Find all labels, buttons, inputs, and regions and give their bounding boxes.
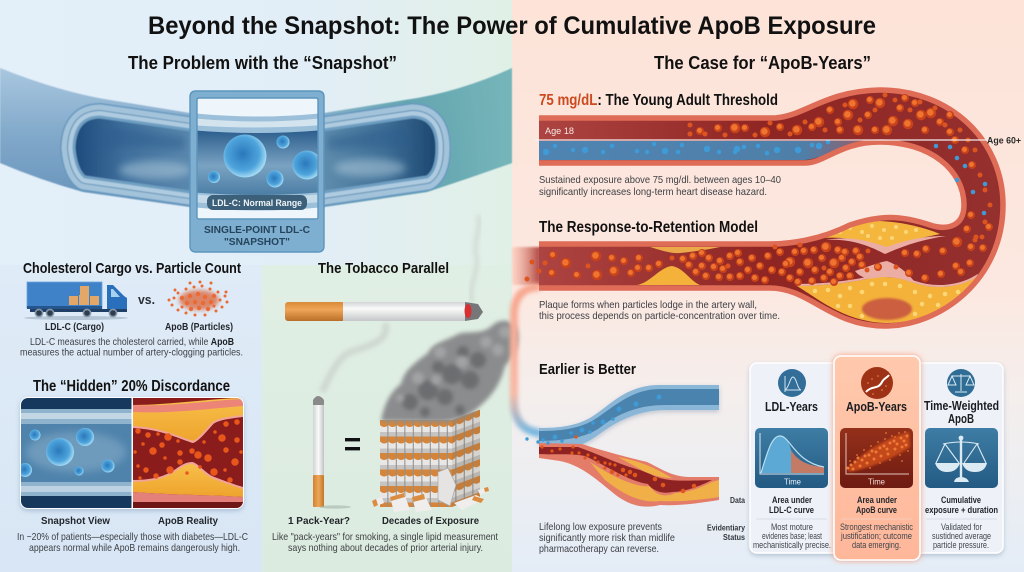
labels: cargo and particles: ApoB (Particles)	[165, 321, 233, 333]
card title: ApoB	[948, 411, 974, 426]
status: ldl-years	[753, 522, 831, 550]
labels: snapshot view and apob reality	[41, 515, 218, 527]
heading: response-to-retention model: The Response-to-Retention Model	[539, 219, 758, 236]
lower plaque with rupture	[797, 261, 978, 323]
row labels: data and evidentiary status: Evidentiary	[707, 522, 745, 532]
snapshot caption: "SNAPSHOT"	[224, 237, 290, 248]
card: apob-years highlighted	[834, 356, 920, 560]
timeline line	[535, 139, 988, 141]
status: ldl-years: mechanistically precise.	[753, 540, 831, 550]
status: time-weighted: sustidned average	[932, 531, 991, 541]
label: age 60+: Age 60+	[987, 136, 1021, 146]
data: cumulative exposure	[925, 495, 998, 516]
icon: horizontal cigarette with smoke	[285, 215, 483, 392]
icon: apob particle cluster	[169, 282, 227, 315]
text: retention description	[539, 299, 780, 322]
status: time-weighted	[932, 522, 991, 550]
data: area under ldl-c: Area under	[772, 495, 812, 506]
snapshot caption	[204, 225, 310, 248]
chart: area under ldl-c curve	[755, 428, 828, 488]
icon: ldl curve	[778, 369, 806, 397]
small plaques	[637, 266, 700, 285]
cigarette block	[372, 410, 489, 512]
heading: cholesterol cargo vs particle count: Cholesterol Cargo vs. Particle Count	[23, 261, 241, 277]
data: area under apob	[856, 495, 897, 516]
red artery	[539, 443, 719, 507]
text: earlier is better description: Lifelong low exposure prevents	[539, 521, 662, 533]
row labels: data and evidentiary status: Status	[723, 532, 745, 542]
text: retention description: Plaque forms when particles lodge in the artery wall,	[539, 299, 757, 311]
heading: earlier is better: Earlier is Better	[539, 362, 636, 378]
status: apob-years	[840, 522, 914, 550]
title: Beyond the Snapshot: The Power of Cumulative ApoB Exposure	[148, 12, 876, 40]
illustration: snapshot view vs apob reality	[18, 397, 244, 509]
comparison table backing card	[750, 363, 1003, 553]
labels: snapshot view and apob reality: ApoB Reality	[158, 515, 218, 527]
status: apob-years: Strongest mechanistic	[840, 522, 914, 532]
labels: cargo and particles: LDL-C (Cargo)	[45, 321, 104, 333]
icon: single vertical cigarette	[313, 396, 351, 509]
icon: equals sign	[345, 438, 360, 450]
text: cargo vs particle description: measures the actual number of artery-clogging particles.	[20, 346, 243, 358]
blue and orange particles	[527, 397, 694, 491]
card title: Time-Weighted	[924, 398, 999, 413]
card title: ApoB-Years	[846, 399, 907, 414]
row labels: data and evidentiary status: Data	[730, 495, 745, 505]
label: age 18: Age 18	[545, 126, 574, 137]
icon: cargo truck	[24, 282, 128, 320]
labels: cargo and particles	[45, 321, 233, 333]
illustration: healthy blue artery with snapshot window	[0, 68, 512, 252]
illustration: diverging healthy and diseased arteries	[527, 385, 719, 507]
snapshot half	[18, 398, 132, 508]
heading: the problem with the snapshot: The Problem with the “Snapshot”	[128, 52, 397, 73]
labels: pack-year and decades: 1 Pack-Year?	[288, 515, 350, 527]
status: time-weighted: Validated for	[941, 522, 982, 532]
text: earlier is better description: significantly more risk than midlife	[539, 532, 675, 544]
orange particles	[527, 95, 990, 282]
heading: tobacco parallel: The Tobacco Parallel	[318, 261, 449, 277]
data: cumulative exposure: Cumulative	[941, 495, 981, 506]
blue particles	[546, 102, 985, 213]
text: threshold description	[539, 174, 781, 198]
status: ldl-years: Most moture	[771, 522, 813, 532]
artery wall	[539, 90, 1003, 326]
chart: balance scale	[925, 428, 998, 488]
artery cross-section	[0, 68, 512, 210]
data: cumulative exposure: exposure + duration	[925, 505, 998, 516]
card title: LDL-Years	[765, 399, 818, 414]
label: vs: vs.	[138, 293, 155, 307]
normal range pill: LDL-C: Normal Range	[212, 198, 302, 209]
top plaque	[822, 221, 946, 254]
card: ldl-years	[753, 369, 831, 550]
illustration: connector from retention artery to early artery	[512, 247, 540, 433]
data: area under ldl-c: LDL-C curve	[769, 505, 814, 516]
text: threshold description: Sustained exposure above 75 mg/dl. between ages 10–40	[539, 174, 781, 186]
card: time-weighted apob	[924, 369, 999, 550]
text: threshold description: significantly increases long-term heart disease hazard.	[539, 186, 767, 198]
data: area under apob: ApoB curve	[856, 505, 897, 516]
smoke cloud	[381, 321, 518, 422]
normal range pill	[207, 195, 307, 210]
text: discordance description: In ~20% of patients—especially those with diabetes—LDL-C	[17, 531, 248, 543]
snapshot frame	[190, 91, 324, 252]
heading: hidden 20% discordance: The “Hidden” 20% Discordance	[33, 378, 230, 395]
icon: apob rising particles	[861, 367, 893, 399]
text: earlier is better description: pharmacotherapy can reverse.	[539, 543, 659, 555]
status: apob-years: justification; cutcome	[840, 531, 912, 541]
text: discordance description	[17, 531, 248, 554]
chart: area under ldl-c curve: Time	[784, 476, 801, 486]
labels: pack-year and decades	[288, 515, 479, 527]
heading: young adult threshold: 75 mg/dL: The Young Adult Threshold	[539, 92, 778, 109]
data: area under ldl-c	[769, 495, 814, 516]
labels: snapshot view and apob reality: Snapshot View	[41, 515, 111, 527]
text: retention description: this process depends on particle-concentration over time.	[539, 310, 780, 322]
chart: area under apob curve: Time	[868, 476, 885, 486]
blue healthy stream	[539, 141, 862, 160]
text: cargo vs particle description: LDL-C measures the cholesterol carried, while ApoB	[30, 336, 234, 348]
blue particles in window	[208, 134, 322, 188]
labels: pack-year and decades: Decades of Exposure	[382, 515, 479, 527]
icon: scales	[947, 369, 975, 397]
illustration: long artery from age 18 to age 60+	[527, 90, 1003, 326]
apob reality half	[133, 398, 243, 508]
card title	[924, 398, 999, 426]
heading: the case for apob-years: The Case for “ApoB-Years”	[654, 52, 871, 73]
status: time-weighted: particle pressure.	[933, 540, 989, 550]
blue artery	[539, 385, 719, 444]
text: cargo vs particle description	[20, 336, 243, 358]
data: area under apob: Area under	[857, 495, 897, 506]
snapshot caption: SINGLE-POINT LDL-C	[204, 225, 310, 236]
text: tobacco description	[272, 531, 498, 554]
chart: area under apob curve	[840, 428, 913, 488]
text: earlier is better description	[539, 521, 675, 555]
snapshot window	[198, 99, 318, 218]
row labels: data and evidentiary status	[707, 495, 745, 542]
text: tobacco description: Like "pack-years" for smoking, a single lipid measurement	[272, 531, 498, 543]
status: apob-years: data emerging.	[852, 540, 901, 550]
status: ldl-years: evidenes base; least	[762, 531, 822, 541]
icon: pile of cigarettes with smoke	[372, 321, 518, 512]
text: tobacco description: says nothing about decades of prior arterial injury.	[288, 542, 483, 554]
text: discordance description: appears normal while ApoB remains dangerously high.	[29, 542, 240, 554]
